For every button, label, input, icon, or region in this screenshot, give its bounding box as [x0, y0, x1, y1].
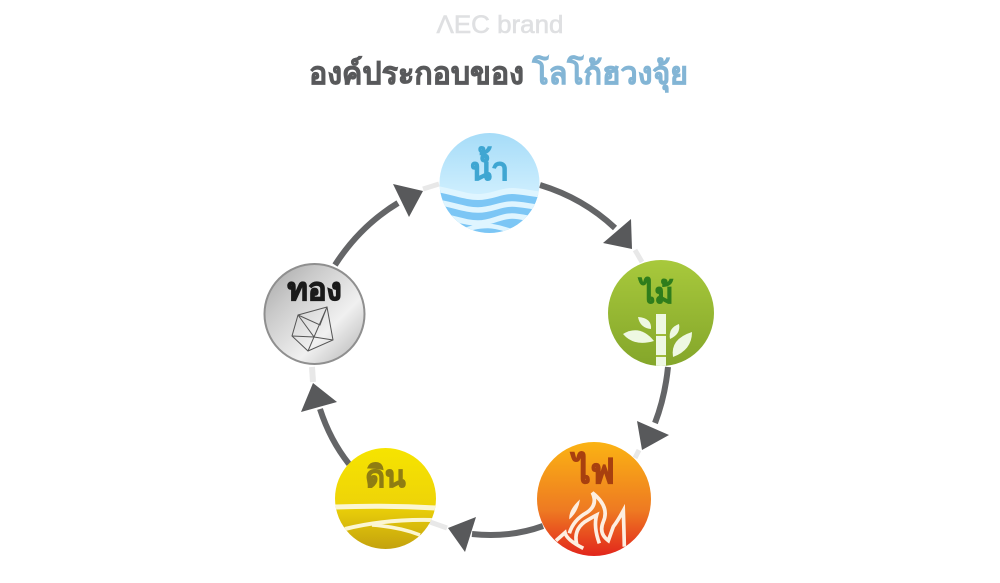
- gem icon: [292, 307, 333, 351]
- water label: น้ำ: [470, 146, 509, 187]
- brand name: ΛEC brand: [436, 11, 564, 39]
- earth layers: [335, 506, 436, 535]
- earth label: ดิน: [366, 461, 406, 494]
- cycle arrow: earth to gold: [301, 367, 349, 464]
- element: gold: [264, 264, 364, 364]
- cycle arrow: fire to earth: [430, 517, 543, 552]
- title: องค์ประกอบของ โลโก้ฮวงจุ้ย: [309, 55, 688, 93]
- wood label: ไม้: [638, 277, 673, 309]
- element: fire: [537, 442, 651, 556]
- cycle arrow: gold to water: [335, 184, 439, 265]
- element: wood: [608, 260, 714, 368]
- bamboo icon: [623, 314, 692, 368]
- element: water: [440, 133, 540, 233]
- water waves: [440, 186, 538, 233]
- element: earth: [335, 448, 436, 549]
- flame icon: [556, 493, 624, 548]
- gold label: ทอง: [287, 272, 342, 307]
- cycle arrow: water to wood: [540, 185, 642, 262]
- cycle arrow: wood to fire: [635, 367, 669, 458]
- fire label: ไฟ: [570, 451, 615, 491]
